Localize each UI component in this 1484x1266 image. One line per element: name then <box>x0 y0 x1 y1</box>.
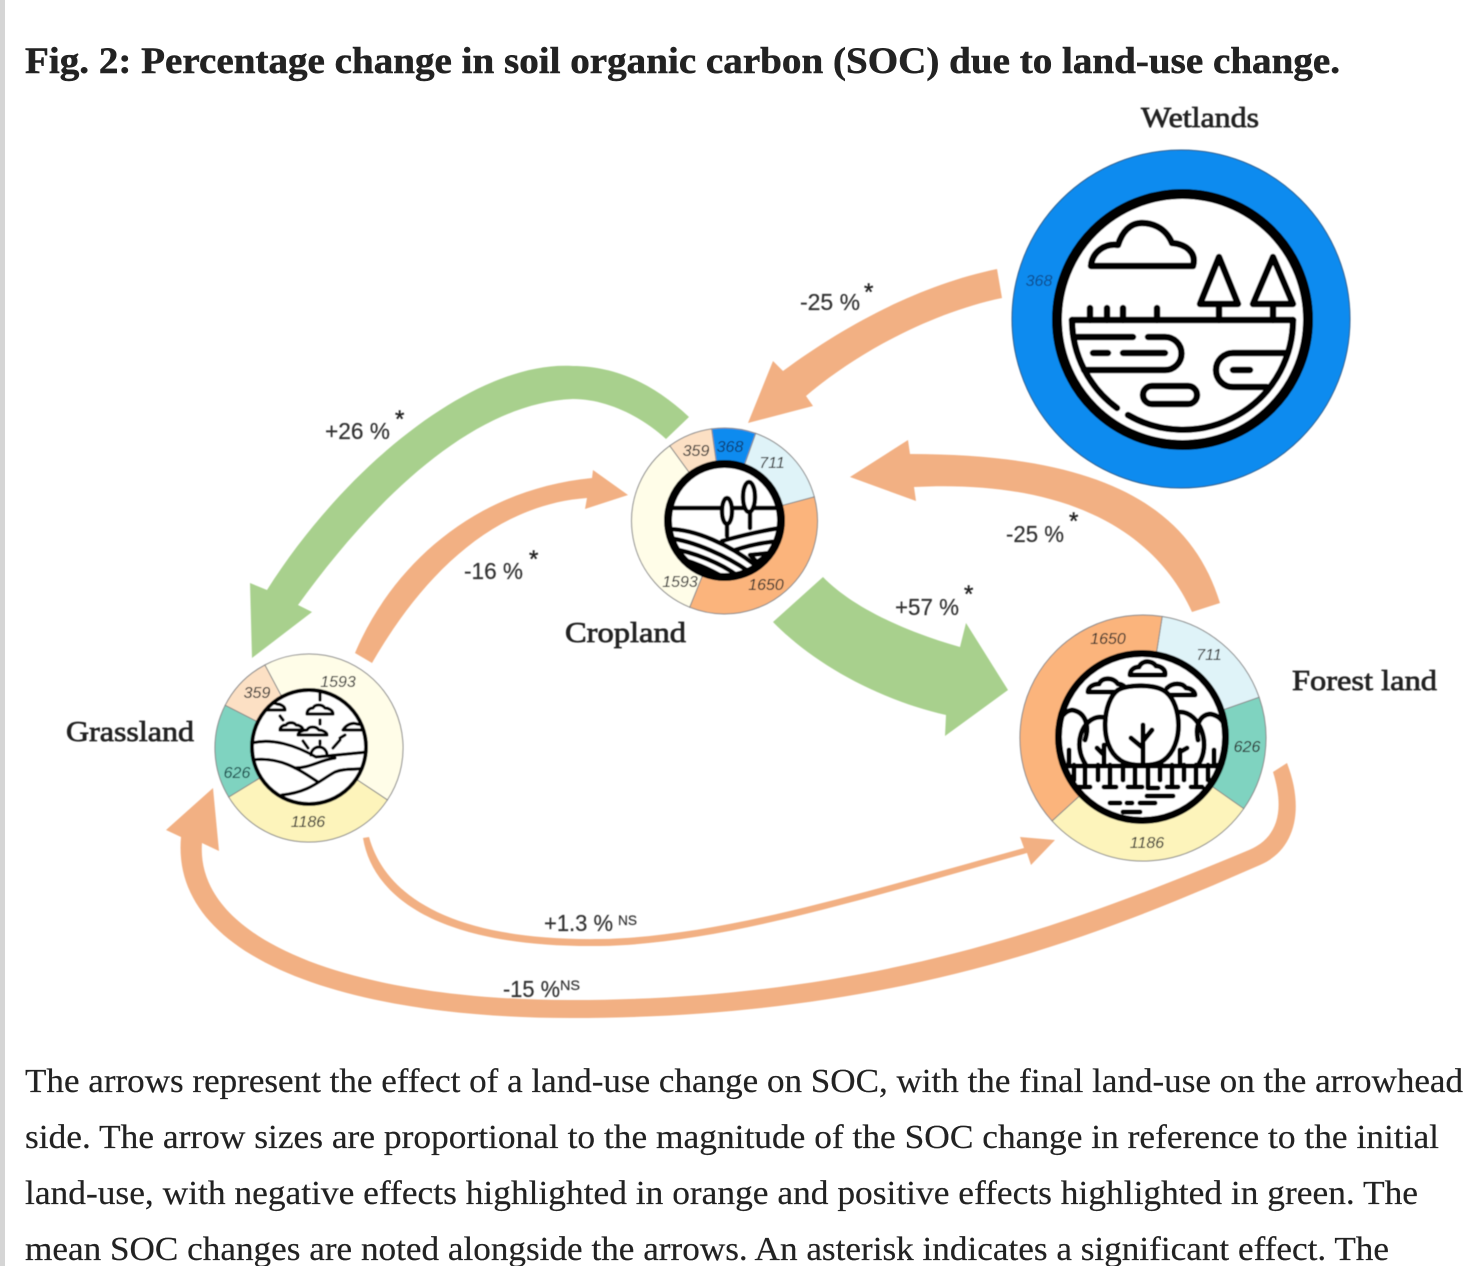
grassland counts: 1593 <box>320 674 356 691</box>
label: forest land: Forest land <box>1292 666 1437 697</box>
icon: forest <box>1056 654 1228 820</box>
icon: grassland hills <box>252 690 368 804</box>
node: forest land <box>1020 615 1266 861</box>
effect: cropland to forest land <box>895 581 973 620</box>
arrow: grassland to forest land <box>363 837 1055 946</box>
forest land counts: 1650 <box>1090 631 1126 648</box>
effect: forest land to grassland: -15 % <box>503 976 560 1002</box>
effect: cropland to forest land: * <box>964 581 973 608</box>
node: wetlands <box>1012 150 1350 488</box>
arrow: grassland to cropland <box>355 470 628 663</box>
effect: cropland to grassland: +26 % <box>325 418 390 444</box>
title: Fig. 2: Percentage change in soil organic carbon (SOC) due to land-use change. <box>25 41 1340 82</box>
effect: grassland to cropland: -16 % <box>464 558 523 584</box>
node: grassland <box>215 654 403 842</box>
cropland counts <box>662 439 785 594</box>
cropland counts: 1593 <box>662 574 698 591</box>
forest land counts: 711 <box>1196 647 1222 664</box>
grassland counts: 359 <box>244 685 270 702</box>
forest land segments <box>1020 615 1266 861</box>
arrow: wetlands to cropland <box>748 269 1002 423</box>
effect: cropland to grassland: * <box>395 406 404 433</box>
effect: cropland to forest land: +57 % <box>895 594 959 620</box>
cropland counts: 368 <box>717 439 743 456</box>
arrow: cropland to forest land <box>773 577 1008 736</box>
grassland counts <box>224 674 356 831</box>
effect: grassland to forest land: NS <box>618 912 637 928</box>
label: wetlands: Wetlands <box>1141 103 1259 134</box>
effect: grassland to forest land: +1.3 % <box>544 910 613 936</box>
forest land counts: 626 <box>1234 739 1260 756</box>
diagram: land-use change flows <box>66 103 1437 1018</box>
caption text <box>25 1063 1463 1266</box>
effect: grassland to cropland <box>464 546 538 584</box>
arrow: forest land to cropland <box>850 440 1220 612</box>
arrow: forest land to grassland <box>166 763 1296 1018</box>
effect: forest land to cropland: -25 % <box>1006 521 1064 547</box>
grassland counts: 626 <box>224 765 250 782</box>
caption text: side. The arrow sizes are proportional to the magnitude of the SOC change in reference to the initial <box>25 1119 1439 1156</box>
label: grassland: Grassland <box>66 717 194 748</box>
wetlands count: 368 <box>1026 273 1052 290</box>
forest land counts <box>1090 631 1260 852</box>
icon: wetlands landscape <box>1057 194 1308 445</box>
effect: wetlands to cropland: -25 % <box>800 289 860 315</box>
page left border <box>0 0 5 1266</box>
cropland segments <box>632 428 817 614</box>
effect: forest land to cropland <box>1006 508 1078 547</box>
node: cropland <box>632 428 817 614</box>
grassland counts: 1186 <box>291 814 325 831</box>
effect: forest land to grassland: NS <box>560 977 580 993</box>
caption text: land-use, with negative effects highlighted in orange and positive effects highlighted in green. The <box>25 1175 1418 1212</box>
effect: cropland to grassland <box>325 406 404 444</box>
caption text: The arrows represent the effect of a land-use change on SOC, with the final land-use on the arrowhead <box>25 1063 1463 1100</box>
arrow: cropland to grassland <box>250 366 689 658</box>
icon: cropland fields <box>668 464 781 580</box>
label: cropland: Cropland <box>565 618 686 649</box>
cropland counts: 711 <box>759 455 785 472</box>
grassland segments <box>215 654 403 842</box>
effect: grassland to cropland: * <box>529 546 538 573</box>
cropland counts: 1650 <box>748 577 784 594</box>
forest land counts: 1186 <box>1130 835 1164 852</box>
cropland counts: 359 <box>683 443 709 460</box>
effect: forest land to cropland: * <box>1069 508 1078 535</box>
effect: wetlands to cropland: * <box>864 279 873 306</box>
effect: wetlands to cropland <box>800 279 873 315</box>
wetlands ring <box>1012 150 1350 488</box>
